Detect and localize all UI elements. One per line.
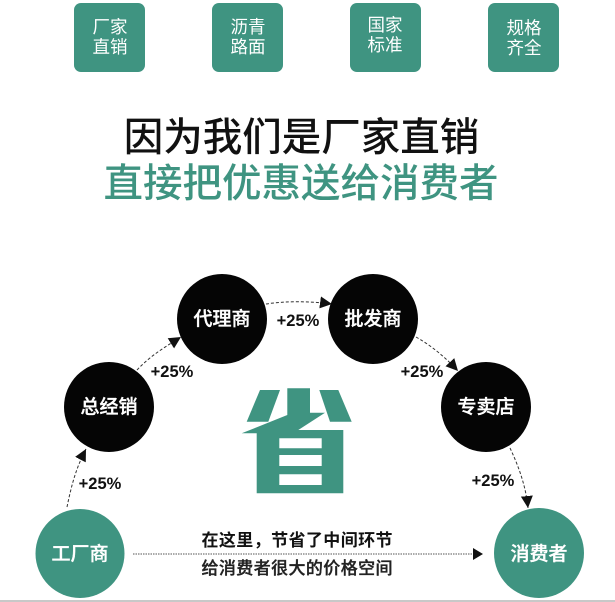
feature badge: 厂家直销 <box>74 3 145 72</box>
arrow: 批发商 to 专卖店 <box>416 337 458 371</box>
title line 1: 因为我们是厂家直销 <box>124 116 479 160</box>
markup label: 总经销 to 代理商: +25% <box>151 363 194 381</box>
feature badge: 沥青路面 <box>212 3 283 72</box>
feature badge: 沥青路面: 沥青 <box>230 17 266 37</box>
markup label: 代理商 to 批发商: +25% <box>277 312 320 330</box>
big icon character: 省 <box>242 388 352 493</box>
node: 工厂商: 工厂商 <box>51 543 109 565</box>
savings note line 2: 给消费者很大的价格空间 <box>202 559 392 578</box>
node: 专卖店: 专卖店 <box>457 396 515 418</box>
arrow: 专卖店 to 消费者 <box>510 448 528 508</box>
node: 工厂商 <box>36 509 124 598</box>
node: 代理商: 代理商 <box>193 308 251 330</box>
markup label: 批发商 to 专卖店: +25% <box>401 363 444 381</box>
title line 2: 直接把优惠送给消费者 <box>104 162 498 206</box>
node: 批发商: 批发商 <box>344 308 402 330</box>
node: 代理商 <box>177 274 267 364</box>
feature badge: 国家标准: 标准 <box>368 35 402 55</box>
feature badge: 厂家直销: 厂家 <box>92 17 128 37</box>
node: 总经销 <box>64 362 154 452</box>
arrow: 总经销 to 代理商 <box>137 337 181 370</box>
feature badge: 厂家直销: 直销 <box>92 37 128 57</box>
node: 批发商 <box>328 274 418 364</box>
markup label: 专卖店 to 消费者: +25% <box>472 472 515 490</box>
feature badge: 沥青路面: 路面 <box>230 37 266 57</box>
savings note line 1: 在这里，节省了中间环节 <box>202 530 392 550</box>
node: 总经销: 总经销 <box>80 396 138 418</box>
node: 消费者 <box>494 508 584 598</box>
arrow: 代理商 to 批发商 <box>266 302 332 304</box>
feature badge: 国家标准: 国家 <box>368 15 402 35</box>
arrow: 工厂商 to 总经销 <box>67 449 86 507</box>
feature badge: 规格齐全: 规格 <box>506 18 542 38</box>
node: 消费者: 消费者 <box>510 543 568 565</box>
feature badge: 国家标准 <box>350 3 421 72</box>
node: 专卖店 <box>441 362 531 452</box>
feature badge: 规格齐全 <box>488 3 559 72</box>
markup label: 工厂商 to 总经销: +25% <box>79 475 122 493</box>
arrow: 工厂商 direct to 消费者 <box>133 548 483 560</box>
feature badge: 规格齐全: 齐全 <box>506 38 542 58</box>
